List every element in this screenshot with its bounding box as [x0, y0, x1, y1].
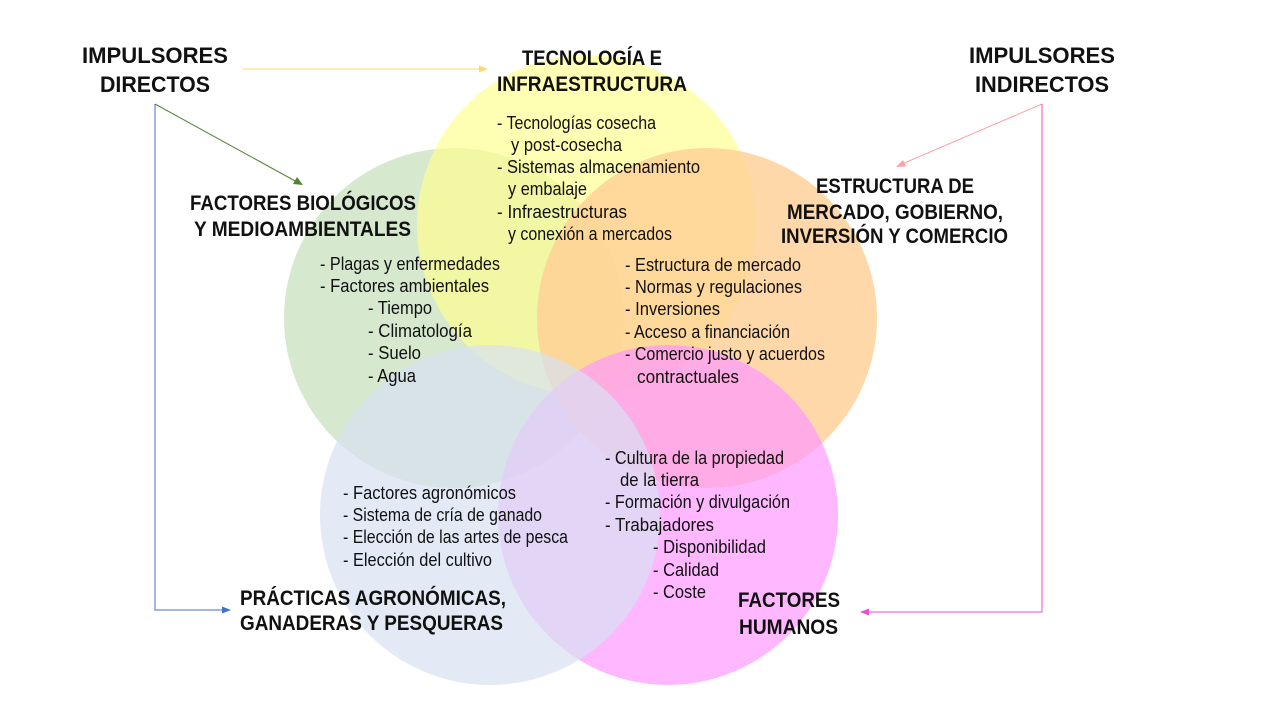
text block: factores humanos: - Trabajadores — [605, 515, 714, 535]
heading: impulsores directos: DIRECTOS — [100, 72, 210, 97]
text block: estructura de mercado — [625, 255, 825, 387]
circle: factores humanos (pink) — [498, 345, 838, 685]
text block: factores biológicos: - Tiempo — [368, 298, 432, 318]
heading: impulsores indirectos: IMPULSORES — [969, 43, 1115, 68]
text block: estructura de mercado: - Acceso a financiación — [625, 322, 790, 342]
text block: factores biológicos: - Agua — [368, 366, 417, 386]
text block: factores humanos: - Coste — [653, 582, 706, 602]
arrow: indirectos to factores humanos — [860, 104, 1042, 616]
arrow: directos to tecnología — [243, 66, 488, 72]
text block: factores biológicos: - Plagas y enfermedades — [320, 254, 500, 274]
arrow: directos to factores biológicos — [155, 104, 303, 185]
heading: tecnología e infraestructura: TECNOLOGÍA E — [522, 47, 662, 70]
text block: prácticas agronómicas — [343, 483, 569, 570]
heading: prácticas agronómicas: PRÁCTICAS AGRONÓMICAS, — [240, 586, 506, 610]
heading: factores humanos — [738, 589, 840, 639]
text block: estructura de mercado: - Estructura de mercado — [625, 255, 801, 275]
text block: factores humanos: - Formación y divulgación — [605, 492, 790, 512]
text block: factores humanos: - Disponibilidad — [653, 537, 766, 557]
heading: tecnología e infraestructura: INFRAESTRUCTURA — [497, 73, 687, 96]
text block: prácticas agronómicas: - Factores agronómicos — [343, 483, 516, 503]
circle: tecnología (yellow) — [417, 55, 757, 395]
arrow: directos to prácticas agronómicas — [155, 104, 231, 614]
text block: prácticas agronómicas: - Sistema de cría de ganado — [343, 505, 542, 525]
text block: tecnología: - Infraestructuras — [497, 202, 627, 222]
text block: factores humanos: - Calidad — [653, 560, 719, 580]
text block: estructura de mercado: - Comercio justo y acuerdos — [625, 344, 825, 364]
heading: impulsores directos — [82, 43, 228, 97]
text block: prácticas agronómicas: - Elección del cultivo — [343, 550, 492, 570]
text block: tecnología: - Sistemas almacenamiento — [497, 157, 700, 177]
text block: tecnología: y post-cosecha — [511, 135, 623, 155]
arrow: indirectos to estructura de mercado — [896, 104, 1042, 167]
heading: factores biológicos y medioambientales: Y MEDIOAMBIENTALES — [194, 218, 411, 241]
text block: factores biológicos: - Suelo — [368, 343, 421, 363]
text block: tecnología: y embalaje — [508, 179, 587, 199]
text block: estructura de mercado: contractuales — [637, 367, 739, 387]
text block: prácticas agronómicas: - Elección de las artes de pesca — [343, 527, 569, 547]
heading: estructura de mercado: MERCADO, GOBIERNO, — [787, 201, 1003, 224]
heading: factores humanos: FACTORES — [738, 589, 840, 612]
heading: factores humanos: HUMANOS — [739, 616, 838, 639]
text block: factores biológicos: - Factores ambientales — [320, 276, 489, 296]
text block: factores humanos: de la tierra — [620, 470, 700, 490]
text block: factores humanos — [605, 448, 790, 602]
heading: tecnología e infraestructura — [497, 47, 687, 96]
text block: tecnología: y conexión a mercados — [508, 224, 672, 244]
heading: estructura de mercado: INVERSIÓN Y COMERCIO — [781, 224, 1008, 248]
text block: factores biológicos: - Climatología — [368, 321, 473, 341]
heading: impulsores indirectos — [969, 43, 1115, 97]
heading: factores biológicos y medioambientales: FACTORES BIOLÓGICOS — [190, 191, 416, 215]
heading: impulsores indirectos: INDIRECTOS — [975, 72, 1109, 97]
text block: estructura de mercado: - Normas y regulaciones — [625, 277, 802, 297]
heading: prácticas agronómicas: GANADERAS Y PESQUERAS — [240, 612, 503, 635]
text block: tecnología: - Tecnologías cosecha — [497, 113, 657, 133]
circle: estructura de mercado (orange) — [537, 148, 877, 488]
text block: estructura de mercado: - Inversiones — [625, 299, 720, 319]
circle: prácticas agronómicas (blue) — [320, 345, 660, 685]
text block: factores humanos: - Cultura de la propiedad — [605, 448, 784, 468]
circle: factores biológicos (green) — [284, 148, 624, 488]
heading: estructura de mercado — [781, 175, 1008, 248]
heading: impulsores directos: IMPULSORES — [82, 43, 228, 68]
text block: factores biológicos — [320, 254, 500, 386]
heading: estructura de mercado: ESTRUCTURA DE — [816, 175, 974, 198]
heading: factores biológicos y medioambientales — [190, 191, 416, 241]
text block: tecnología — [497, 113, 700, 244]
heading: prácticas agronómicas — [240, 586, 506, 635]
